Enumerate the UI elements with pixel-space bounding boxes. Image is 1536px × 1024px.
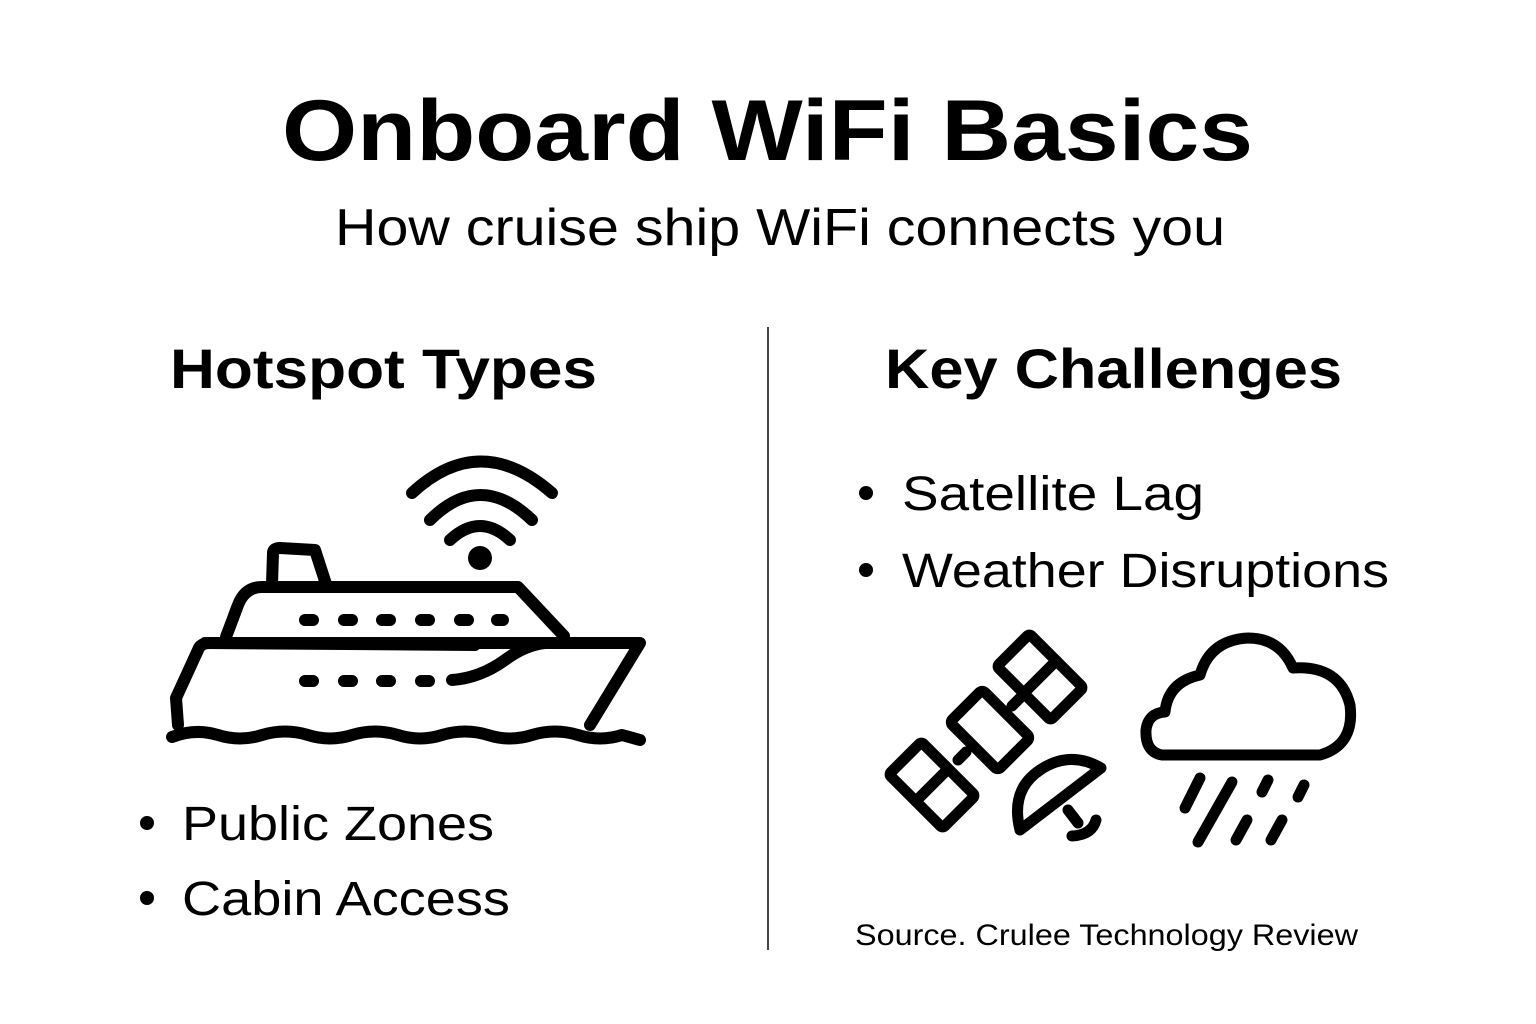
icon: ship with wifi	[172, 462, 640, 740]
source note: Source. Crulee Technology Review	[855, 919, 1358, 952]
bullet list: hotspot types	[140, 798, 510, 926]
bullet list: challenges: Satellite Lag	[902, 468, 1204, 521]
panel: hotspot types	[140, 337, 640, 926]
bullet list: challenges: Weather Disruptions	[902, 545, 1389, 598]
panel: key challenges	[855, 337, 1389, 952]
divider	[767, 327, 769, 950]
icon: satellite	[889, 634, 1101, 836]
heading: hotspot types: Hotspot Types	[170, 337, 597, 400]
subtitle: How cruise ship WiFi connects you	[335, 199, 1225, 257]
icon: rain cloud	[1146, 638, 1351, 842]
bullet list: hotspot types: Cabin Access	[182, 873, 510, 926]
heading: key challenges: Key Challenges	[885, 337, 1342, 400]
bullet list: challenges	[859, 468, 1389, 598]
bullet list: hotspot types: Public Zones	[182, 798, 494, 851]
title: Onboard WiFi Basics	[282, 83, 1253, 179]
